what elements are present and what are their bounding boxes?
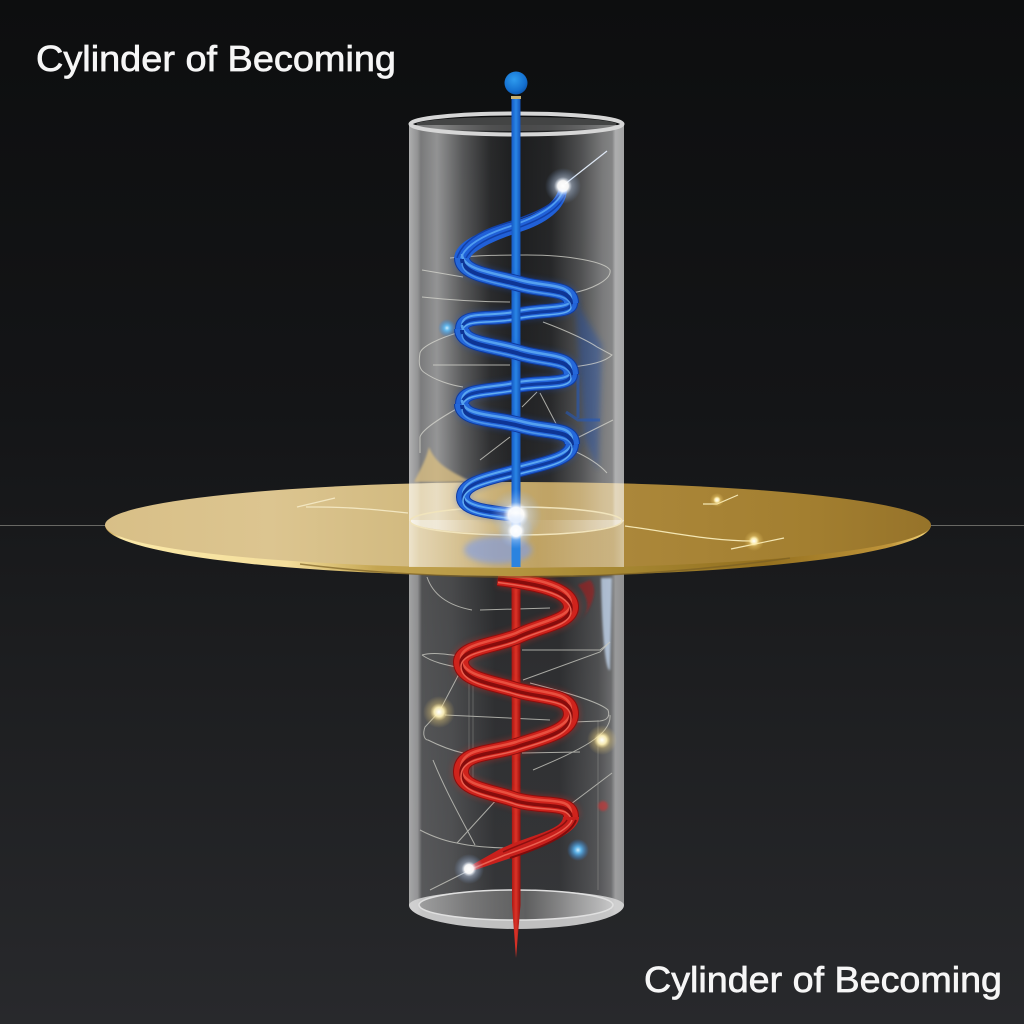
blue front strands xyxy=(462,254,572,449)
cyan node xyxy=(567,839,589,861)
disc rim xyxy=(105,525,931,576)
disc star right top xyxy=(703,493,738,507)
faint red node xyxy=(598,801,608,811)
horizon line left xyxy=(0,524,106,526)
upper cylinder xyxy=(409,114,624,567)
red needle xyxy=(512,572,520,958)
yellow left node xyxy=(423,696,455,728)
blue inner glyph lines xyxy=(566,375,600,420)
top spark xyxy=(545,168,581,204)
blue rod xyxy=(512,97,520,525)
disc left marker xyxy=(297,498,408,513)
gold disc xyxy=(105,482,931,577)
rod extension below xyxy=(512,525,520,567)
lower cylinder xyxy=(409,570,624,929)
blue ball xyxy=(504,72,528,94)
title top left: Cylinder of Becoming xyxy=(36,38,396,79)
centre flare lower xyxy=(498,513,534,549)
blue back strands xyxy=(462,300,572,519)
upper glass body xyxy=(409,125,624,534)
orbit lines upper xyxy=(419,255,613,473)
disc rim underside xyxy=(300,558,790,577)
glow nodes xyxy=(423,168,617,884)
yellow right node xyxy=(587,725,617,755)
top opening xyxy=(416,117,616,131)
blue reflection on disc xyxy=(464,536,532,564)
lower red reflection xyxy=(578,580,594,622)
glass column over disc xyxy=(409,520,624,567)
centre flare upper xyxy=(490,489,542,541)
gold glow triangle inside xyxy=(414,447,472,482)
base ellipse on disc xyxy=(410,507,622,535)
white bottom node xyxy=(454,854,484,884)
lower base annulus xyxy=(409,890,624,929)
lower blue reflection xyxy=(601,578,612,670)
top rim xyxy=(410,114,622,134)
lower orbit lines xyxy=(420,577,612,890)
blue axis xyxy=(504,72,528,567)
red helix strands xyxy=(461,574,571,822)
title bottom right: Cylinder of Becoming xyxy=(644,959,1002,1000)
gold collar xyxy=(511,96,521,99)
blue helix tail xyxy=(454,188,567,258)
blue left spark xyxy=(438,319,456,337)
spark line top xyxy=(565,151,607,184)
lower base floor xyxy=(419,890,613,920)
disc surface xyxy=(105,482,931,568)
red helix xyxy=(461,574,579,871)
disc star right bottom xyxy=(625,526,784,551)
red helix glow xyxy=(461,578,571,817)
lower glass body xyxy=(409,570,624,929)
horizon line right xyxy=(930,524,1024,526)
blue light reflection xyxy=(575,300,602,470)
red helix tail xyxy=(470,817,579,871)
